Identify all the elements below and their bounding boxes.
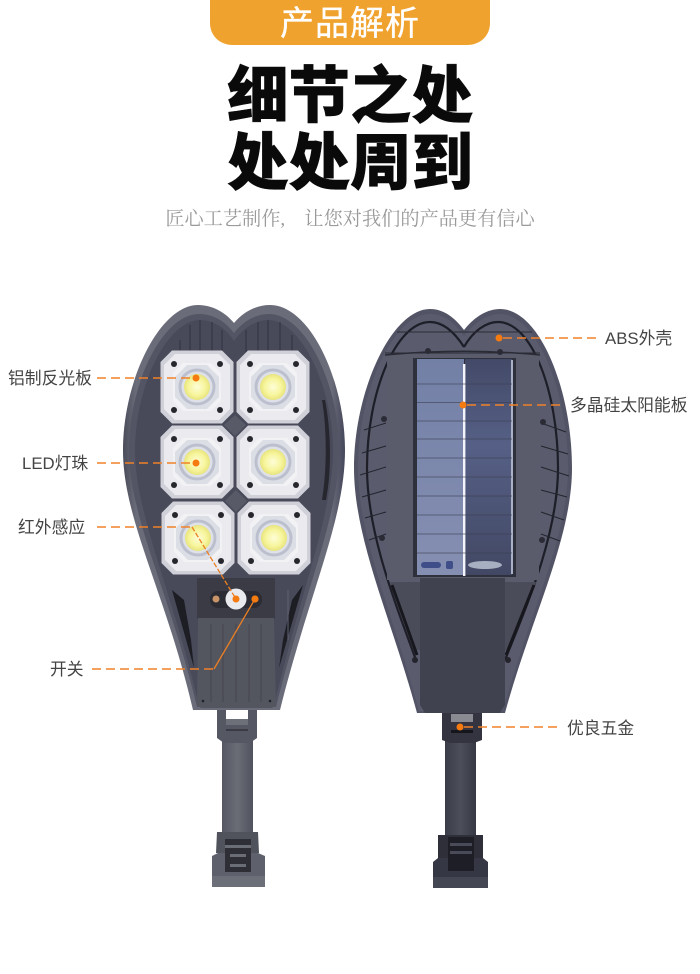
- callout: 开关: [50, 596, 258, 679]
- front stand: [212, 708, 265, 887]
- back housing: [354, 309, 572, 713]
- title: 细节之处: [227, 62, 473, 131]
- callout: 红外感应: 红外感应: [18, 518, 85, 537]
- title: 处处周到: [227, 129, 473, 198]
- callout: 多晶硅太阳能板: 多晶硅太阳能板: [570, 396, 688, 415]
- header pill: [210, 0, 490, 45]
- front housing: [123, 305, 345, 710]
- callout: 多晶硅太阳能板: [460, 396, 688, 415]
- callout: 铝制反光板: [8, 369, 200, 388]
- callout: 优良五金: [456, 719, 634, 738]
- back stand: [433, 713, 488, 888]
- sensor box: [197, 578, 275, 619]
- battery cover: [197, 618, 276, 708]
- callout: LED灯珠: LED灯珠: [22, 454, 88, 473]
- callout: ABS外壳: [496, 329, 672, 348]
- back lamp: [354, 309, 572, 888]
- callout: LED灯珠: [22, 454, 200, 473]
- callout: 开关: 开关: [50, 660, 84, 679]
- LED panels: [160, 350, 310, 574]
- callout: ABS外壳: ABS外壳: [605, 329, 672, 348]
- subtitle: 匠心工艺制作, 让您对我们的产品更有信心: [165, 208, 535, 230]
- title: [227, 62, 473, 198]
- front lamp: [123, 305, 345, 887]
- callout: 红外感应: [18, 518, 240, 602]
- callout: 优良五金: 优良五金: [567, 719, 634, 738]
- rear battery cover: [420, 578, 505, 713]
- header pill: 产品解析: [280, 5, 420, 43]
- solar panel: [413, 358, 516, 577]
- callout: 铝制反光板: 铝制反光板: [8, 369, 92, 388]
